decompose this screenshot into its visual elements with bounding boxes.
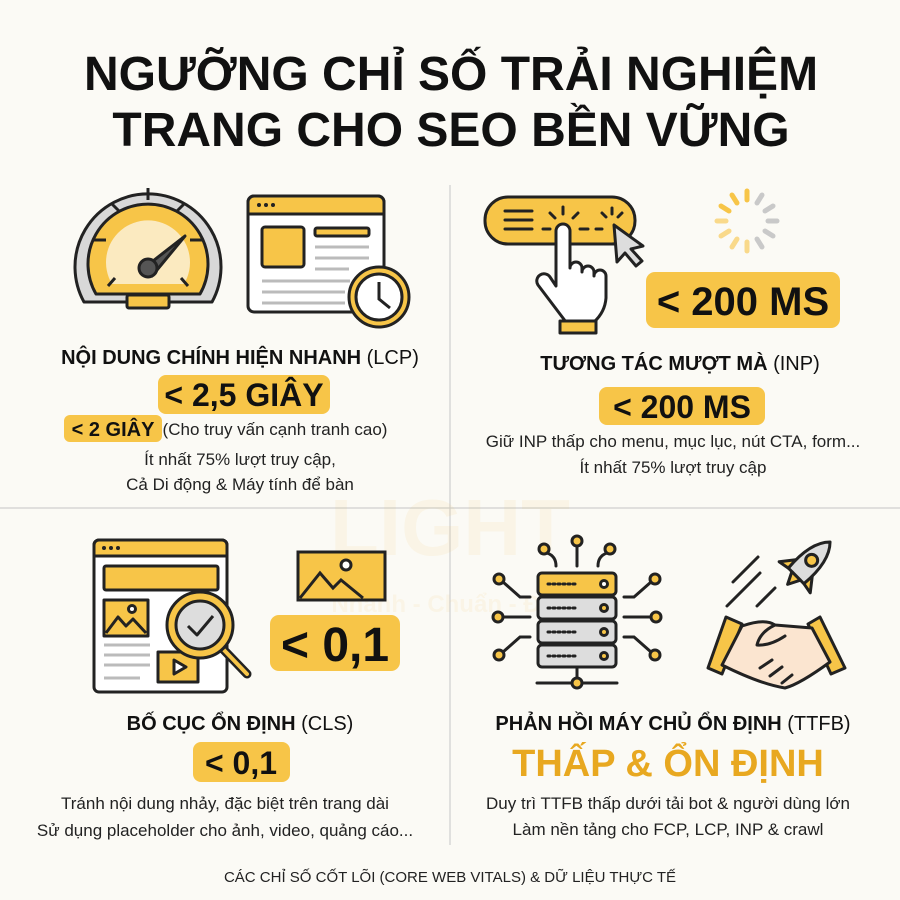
text: TTFB notes: Duy trì TTFB thấp dưới tải bot & người dùng lớn [486,794,850,813]
panel: LCP [61,188,419,494]
panel: TTFB [486,526,851,839]
pill: < 0,1: < 0,1 [205,745,277,781]
watermark [330,483,570,618]
title: NGƯỠNG CHỈ SỐ TRẢI NGHIỆM [84,46,818,101]
panel: INP [485,191,860,477]
pill: < 200 MS: < 200 MS [613,389,751,425]
icon: picture [298,552,385,600]
icon: browser with clock [248,196,409,327]
panel: CLS [37,540,413,840]
text: INP notes: Giữ INP thấp cho menu, mục lục, nút CTA, form... [486,432,860,451]
icon: page with magnifier [94,540,247,692]
text: TTFB notes [486,794,850,839]
pill: < 2 GIÂY [64,415,162,442]
footer: CÁC CHỈ SỐ CỐT LÕI (CORE WEB VITALS) & DỮ LIỆU THỰC TẾ [224,868,676,886]
pill: < 200 MS big: < 200 MS [657,280,829,324]
highlight: THẤP & ỔN ĐỊNH: THẤP & ỔN ĐỊNH [512,740,824,785]
watermark: Nhanh - Chuẩn - Đẹp [331,591,569,618]
heading: LCP: NỘI DUNG CHÍNH HIỆN NHANH (LCP) [61,345,419,369]
text: LCP notes: (Cho truy vấn cạnh tranh cao) [163,420,387,439]
text: CLS notes: Tránh nội dung nhảy, đặc biệt trên trang dài [61,794,389,813]
icon: rocket and handshake [708,526,846,688]
text: LCP notes: Cả Di động & Máy tính để bàn [126,475,354,494]
text: INP notes [486,432,860,477]
icon: loading spinner [717,191,777,251]
heading: TTFB: PHẢN HỒI MÁY CHỦ ỔN ĐỊNH (TTFB) [495,711,851,735]
pill: < 0,1 [193,742,290,782]
text: LCP notes: Ít nhất 75% lượt truy cập, [144,450,336,469]
watermark: LIGHT [330,483,570,572]
text: LCP notes [126,420,387,494]
text: TTFB notes: Làm nền tảng cho FCP, LCP, INP & crawl [513,820,823,839]
icon: speedometer [75,188,221,308]
heading: CLS: BỐ CỤC ỔN ĐỊNH (CLS) [127,711,353,735]
text: CLS notes [37,794,413,840]
heading: INP: TƯƠNG TÁC MƯỢT MÀ (INP) [540,352,820,375]
pill: < 0,1 big: < 0,1 [281,619,389,672]
title [84,46,818,157]
text: CLS notes: Sử dụng placeholder cho ảnh, video, quảng cáo... [37,821,413,840]
title: TRANG CHO SEO BỀN VỮNG [112,102,790,157]
pill: < 2,5 GIÂY: < 2,5 GIÂY [164,377,324,413]
pill: < 2 GIÂY: < 2 GIÂY [72,417,155,441]
pill: < 200 MS big [646,272,840,328]
icon: server [493,536,661,688]
text: INP notes: Ít nhất 75% lượt truy cập [580,458,766,477]
icon: click hand [485,197,643,333]
